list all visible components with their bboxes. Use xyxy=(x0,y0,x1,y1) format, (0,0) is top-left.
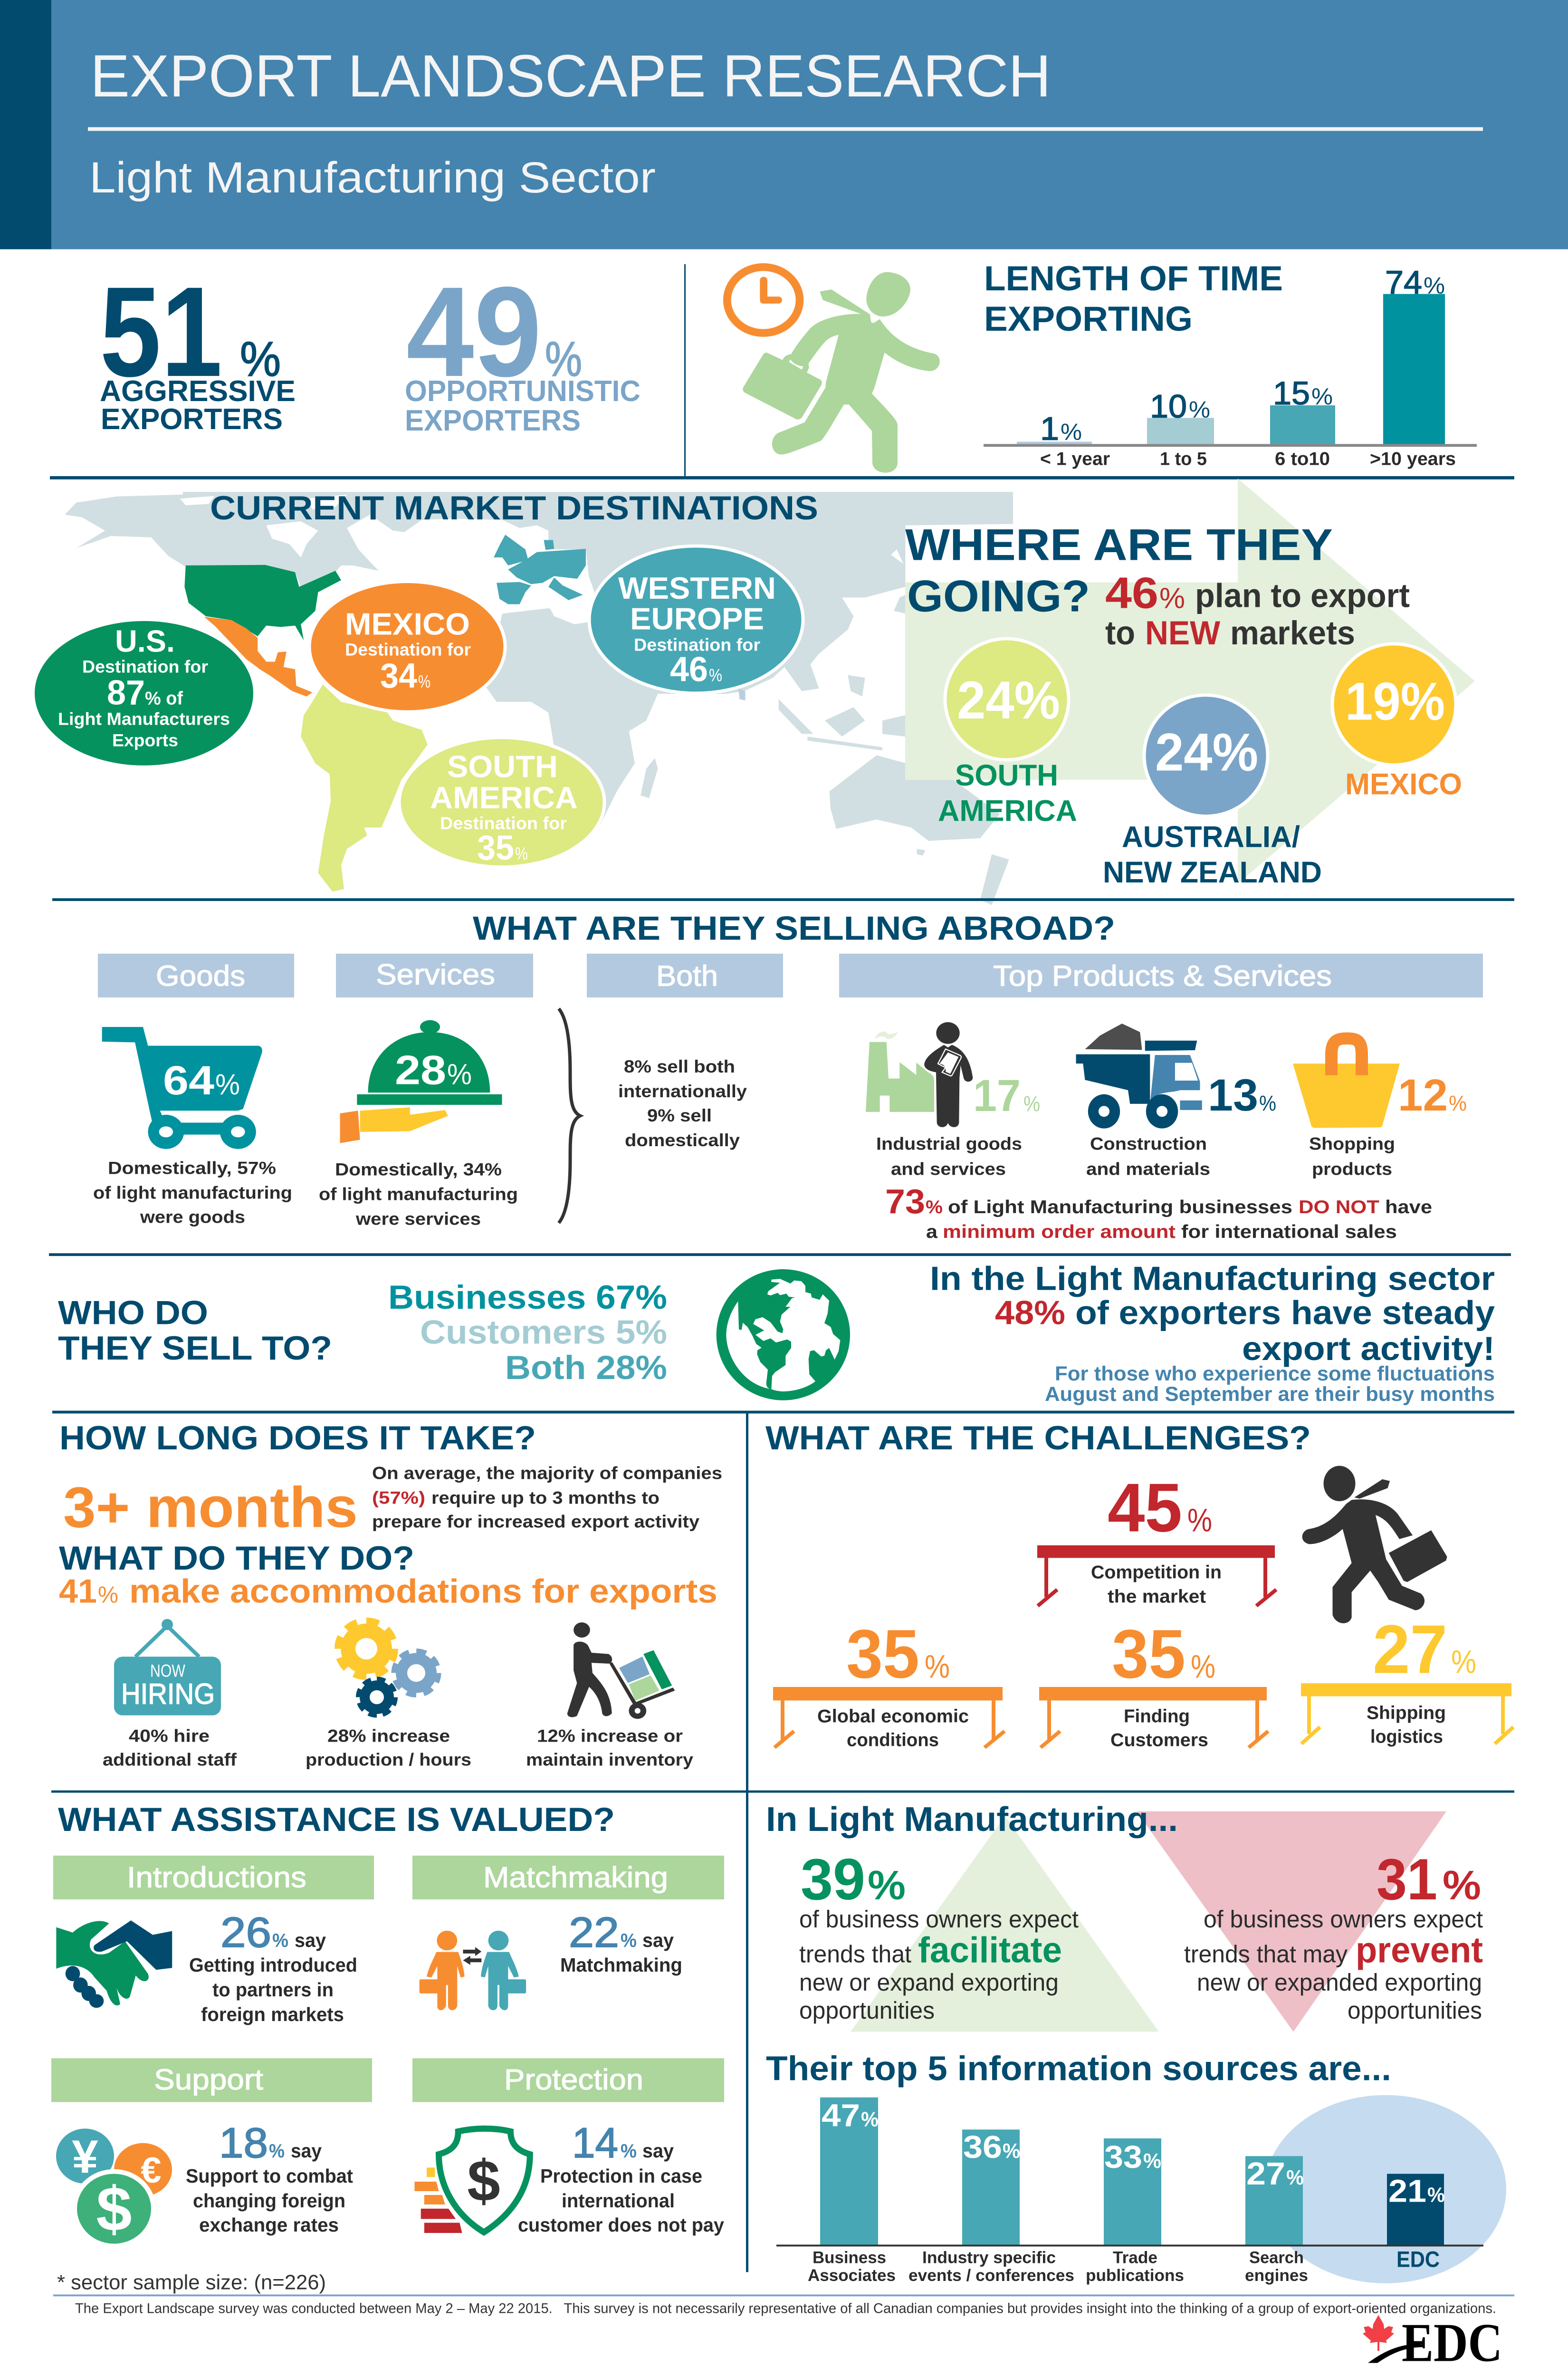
bar chart: 6 to10 xyxy=(1275,449,1330,469)
text: goods domestically xyxy=(93,1158,292,1226)
hurdle: global economic 35%: % xyxy=(925,1648,950,1685)
icon: shield and stairs: $ xyxy=(467,2148,500,2213)
tab: matchmaking xyxy=(412,1856,724,1899)
text: 73% no minimum order amount xyxy=(885,1182,1432,1242)
callout: Western Europe destination xyxy=(589,546,803,693)
tab: both: Both xyxy=(656,960,718,992)
text: 73% no minimum order amount: 73 xyxy=(885,1182,925,1221)
labels: source names: Business xyxy=(813,2248,886,2267)
tab: protection: Protection xyxy=(504,2064,643,2096)
bar chart: % xyxy=(861,2108,879,2131)
bar chart: 27 xyxy=(1246,2156,1285,2192)
stat: 51% aggressive: % xyxy=(240,332,281,387)
heading: where are they going xyxy=(905,520,1333,621)
tab: support: Support xyxy=(154,2064,263,2096)
stat: 51% aggressive xyxy=(100,260,296,436)
icon: currency coins xyxy=(56,2128,172,2246)
stat: 51% aggressive: AGGRESSIVE xyxy=(100,375,296,408)
labels: source names: Search xyxy=(1249,2248,1304,2267)
text: 73% no minimum order amount: have xyxy=(1385,1197,1432,1217)
bar chart xyxy=(984,264,1477,469)
callout: Mexico destination xyxy=(309,582,505,712)
labels: source names: events / conferences xyxy=(908,2266,1074,2285)
panel: exporter types xyxy=(100,260,641,437)
icon: shield and stairs xyxy=(414,2128,530,2233)
callout: U.S. destination xyxy=(33,620,255,767)
text: 22% matchmaking: say xyxy=(642,1929,674,1951)
hurdle: shipping logistics 27%: logistics xyxy=(1370,1726,1443,1747)
hurdle: competition 45% xyxy=(1037,1469,1276,1607)
text: 26% introductions: Getting introduced xyxy=(189,1954,357,1976)
triangle: facilitate xyxy=(851,1816,1159,2031)
heading xyxy=(984,259,1283,338)
text: steady export activity: export activity! xyxy=(1242,1330,1495,1368)
hurdle: finding customers 35%: Customers xyxy=(1110,1730,1208,1750)
text: 14% protection xyxy=(518,2119,724,2236)
heading: HOW LONG DOES IT TAKE? xyxy=(59,1419,536,1457)
text: explanation: (57%) xyxy=(372,1488,425,1508)
tab: goods xyxy=(98,954,294,997)
title: EXPORT LANDSCAPE RESEARCH xyxy=(90,42,1051,109)
heading: current market destinations: CURRENT MARKET DESTINATIONS xyxy=(210,489,818,527)
highlight: EDC circle xyxy=(1265,2095,1506,2283)
bar chart: % xyxy=(1143,2150,1161,2173)
bar chart: % xyxy=(1424,273,1445,299)
hurdle: finding customers 35%: 35 xyxy=(1112,1616,1186,1693)
tab: top products and services xyxy=(839,954,1483,997)
heading: In Light Manufacturing... xyxy=(766,1800,1178,1839)
text: 31% prevent: new or expanded exporting xyxy=(1197,1969,1482,1996)
text: 41% accommodations: make accommodations for exports xyxy=(129,1572,717,1610)
icon: now hiring sign: NOW xyxy=(150,1661,185,1680)
text: goods domestically: of light manufacturing xyxy=(93,1183,292,1202)
stat: 49% opportunistic: % xyxy=(545,332,582,387)
text: steady export activity xyxy=(930,1260,1495,1406)
text: 26% introductions: to partners in xyxy=(212,1978,334,2001)
callout: U.S. destination: U.S. xyxy=(115,624,175,658)
stat: 51% aggressive: 51 xyxy=(100,260,222,403)
label: increase production: 28% increase xyxy=(327,1726,450,1746)
text: 14% protection: Protection in case xyxy=(540,2165,702,2187)
bar chart: 21 xyxy=(1388,2174,1426,2209)
text: services domestically: of light manufacturing xyxy=(319,1184,518,1204)
icon: gears xyxy=(338,1621,439,1715)
labels: product categories: Shopping xyxy=(1309,1134,1395,1154)
label: hire: 40% hire xyxy=(129,1726,210,1746)
text: steady export activity: In the Light Manufacturing sector xyxy=(930,1260,1495,1298)
tab: introductions xyxy=(53,1856,374,1899)
text: 22% matchmaking: 22 xyxy=(569,1909,619,1956)
labels: source names: Industry specific xyxy=(922,2248,1056,2267)
bar chart: 36 xyxy=(963,2130,1002,2165)
text: 14% protection: % xyxy=(621,2140,637,2162)
callout: 19% Mexico: 19% xyxy=(1345,672,1445,731)
labels: product categories xyxy=(876,1134,1395,1178)
label: inventory: maintain inventory xyxy=(526,1750,693,1770)
hurdle: finding customers 35%: Finding xyxy=(1124,1706,1190,1726)
icon: shopping cart 64% xyxy=(102,1027,262,1149)
text: explanation: On average, the majority of companies xyxy=(372,1463,722,1483)
icon: worker with hand truck xyxy=(567,1622,675,1719)
footer note: The Export Landscape survey was conducted between May 2 – May 22 2015. This survey is not necessarily representative of all Canadian companies but provides insight into the thinking of a group of export-oriented organizations. xyxy=(75,2301,1496,2317)
heading: who do they sell to: THEY SELL TO? xyxy=(58,1329,332,1367)
text: 31% prevent: of business owners expect xyxy=(1204,1905,1483,1933)
text: 18% support: % xyxy=(269,2140,285,2162)
callout: 19% Mexico xyxy=(1332,644,1462,801)
text: services domestically xyxy=(319,1159,518,1228)
stats: customer types: Businesses 67% xyxy=(388,1279,667,1316)
text: goods domestically: were goods xyxy=(140,1207,245,1226)
text: 46% plan to export to new markets: % xyxy=(1159,582,1185,614)
icon: cloche 28%: % xyxy=(447,1058,472,1091)
text: 39% facilitate: opportunities xyxy=(799,1997,935,2024)
icon: dump truck 13%: 13 xyxy=(1208,1070,1258,1121)
text: 46% plan to export to new markets xyxy=(1105,568,1410,652)
callout: 24% South America xyxy=(938,639,1077,827)
icon: factory and worker 17%: 17 xyxy=(973,1071,1021,1121)
icon: globe xyxy=(717,1269,850,1400)
callout: 19% Mexico: MEXICO xyxy=(1345,768,1462,801)
text: explanation: prepare for increased export activity xyxy=(372,1512,699,1532)
heading: WHAT DO THEY DO? xyxy=(59,1540,414,1577)
label: hire: additional staff xyxy=(103,1750,237,1770)
icon: shopping cart 64%: 64 xyxy=(163,1058,214,1103)
text: goods domestically: Domestically, 57% xyxy=(108,1158,276,1178)
hurdle: global economic 35%: Global economic xyxy=(817,1706,969,1726)
icon: cloche 28%: 28 xyxy=(395,1047,446,1093)
text: 46% plan to export to new markets: markets xyxy=(1230,614,1355,652)
bar chart: % xyxy=(1003,2140,1020,2163)
icon: now hiring sign: HIRING xyxy=(121,1678,215,1710)
text: 73% no minimum order amount: DO NOT xyxy=(1299,1197,1379,1217)
callout: 24% Australia / New Zealand: AUSTRALIA/ xyxy=(1122,821,1300,853)
callout: South America destination: 35 xyxy=(477,828,514,867)
icon: currency coins: ¥ xyxy=(72,2130,98,2183)
tab: top products and services: Top Products & Services xyxy=(993,960,1332,992)
text: both summary xyxy=(618,1056,747,1150)
stats: customer types xyxy=(388,1279,667,1387)
labels: source names: EDC xyxy=(1396,2247,1440,2272)
text: 18% support: 18 xyxy=(219,2119,268,2167)
icon: curly brace xyxy=(559,1009,580,1223)
text: 14% protection: international xyxy=(562,2189,675,2212)
panel: challenges xyxy=(765,1419,1513,1750)
text: 39% facilitate: 39 xyxy=(801,1847,865,1912)
icon: handshake xyxy=(56,1920,172,2008)
text: 18% support: changing foreign xyxy=(193,2189,345,2212)
bar chart: 74 xyxy=(1385,264,1422,300)
callout: Western Europe destination: % xyxy=(709,665,722,685)
tab: protection xyxy=(412,2058,724,2102)
tab: matchmaking: Matchmaking xyxy=(483,1861,668,1894)
bar chart: % xyxy=(1061,419,1082,445)
tab: goods: Goods xyxy=(156,960,245,992)
icon: shopping bag 12%: 12 xyxy=(1398,1070,1448,1121)
text: 73% no minimum order amount: of Light Manufacturing businesses xyxy=(948,1197,1292,1217)
tab: services xyxy=(336,954,533,997)
icon: running businessman (green) xyxy=(743,272,940,473)
tab: introductions: Introductions xyxy=(127,1861,306,1894)
labels: product categories: Construction xyxy=(1090,1134,1207,1154)
text: 22% matchmaking: Matchmaking xyxy=(560,1954,682,1976)
callout: 24% South America: 24% xyxy=(957,671,1060,730)
heading: Their top 5 information sources are... xyxy=(766,2049,1391,2088)
bar chart: 47 xyxy=(822,2098,860,2133)
text: 18% support: Support to combat xyxy=(186,2165,353,2187)
callout: U.S. destination: Exports xyxy=(112,730,178,750)
text: 14% protection: 14 xyxy=(572,2119,618,2167)
heading: LENGTH OF TIME xyxy=(984,259,1283,298)
text: 46% plan to export to new markets: plan to export xyxy=(1195,577,1410,614)
text: 41% accommodations: 41 xyxy=(59,1572,97,1610)
text: 39% facilitate: trends that xyxy=(799,1940,911,1967)
text: 14% protection: customer does not pay xyxy=(518,2213,724,2236)
logo: EDC xyxy=(1363,2313,1502,2373)
callout: 24% Australia / New Zealand: NEW ZEALAND xyxy=(1103,856,1322,889)
heading: WHAT ARE THE CHALLENGES? xyxy=(765,1419,1311,1457)
icon: currency coins: € xyxy=(141,2150,162,2191)
hurdle: shipping logistics 27%: 27 xyxy=(1373,1611,1447,1688)
icon: currency coins: $ xyxy=(96,2174,132,2244)
labels: source names: Trade xyxy=(1113,2248,1157,2267)
text: 39% facilitate xyxy=(799,1847,1079,2024)
panel: what do they do xyxy=(59,1540,717,1770)
text: explanation xyxy=(372,1463,722,1532)
hurdle: global economic 35%: 35 xyxy=(846,1616,919,1693)
callout: South America destination xyxy=(399,738,604,867)
panel: length of time exporting xyxy=(984,259,1477,469)
bar chart: 33 xyxy=(1104,2139,1142,2175)
bar chart: >10 years xyxy=(1370,449,1456,469)
stat: 49% opportunistic: OPPORTUNISTIC xyxy=(405,375,641,408)
heading: what are they selling abroad: WHAT ARE THEY SELLING ABROAD? xyxy=(473,910,1115,947)
triangle: prevent xyxy=(1137,1811,1446,2031)
bar chart: 10 xyxy=(1150,388,1187,424)
hurdle: shipping logistics 27%: Shipping xyxy=(1367,1703,1446,1724)
callout: South America destination: AMERICA xyxy=(430,781,578,815)
stat: 51% aggressive: EXPORTERS xyxy=(101,403,283,436)
tab: both xyxy=(587,954,783,997)
text: 31% prevent: opportunities xyxy=(1348,1997,1482,2024)
stat: 49% opportunistic: 49 xyxy=(406,260,542,403)
text: steady export activity: 48% xyxy=(995,1294,1065,1332)
icon: shopping bag 12%: % xyxy=(1449,1092,1467,1115)
text: 46% plan to export to new markets: to xyxy=(1105,614,1135,652)
text: 18% support xyxy=(186,2119,353,2236)
icon: factory and worker 17%: % xyxy=(1023,1092,1040,1116)
hurdle: competition 45%: % xyxy=(1187,1502,1212,1538)
panel: expected trends xyxy=(766,1800,1483,2031)
callout: U.S. destination: Destination for xyxy=(82,657,208,677)
header banner xyxy=(0,0,1568,249)
text: 31% prevent: trends that may xyxy=(1184,1940,1348,1967)
icon: now hiring sign xyxy=(114,1619,221,1715)
text: 18% support: say xyxy=(291,2140,322,2162)
callout: Mexico destination: % xyxy=(418,671,430,691)
text: 22% matchmaking: % xyxy=(621,1929,637,1951)
callout: 24% South America: AMERICA xyxy=(938,795,1077,827)
labels: product categories: Industrial goods xyxy=(876,1134,1022,1154)
text: 73% no minimum order amount: minimum order amount xyxy=(943,1221,1176,1242)
text: 46% plan to export to new markets: NEW xyxy=(1145,614,1221,652)
text: 26% introductions: foreign markets xyxy=(201,2003,344,2025)
hurdle: competition 45%: the market xyxy=(1108,1586,1206,1607)
labels: product categories: products xyxy=(1312,1159,1392,1178)
callout: Mexico destination: Destination for xyxy=(345,640,471,659)
text: 39% facilitate: new or expand exporting xyxy=(799,1969,1059,1996)
heading: where are they going: GOING? xyxy=(907,571,1090,621)
callout: 24% Australia / New Zealand: 24% xyxy=(1155,723,1258,782)
callout: South America destination: Destination for xyxy=(440,813,567,833)
text: 73% no minimum order amount: for international sales xyxy=(1181,1221,1397,1242)
text: 14% protection: say xyxy=(642,2140,674,2162)
text: 31% prevent: 31 xyxy=(1377,1847,1437,1912)
hurdle: global economic 35% xyxy=(773,1616,1004,1750)
heading: WHAT ASSISTANCE IS VALUED? xyxy=(58,1801,615,1839)
bar chart: 15 xyxy=(1273,375,1310,412)
heading: who do they sell to: WHO DO xyxy=(58,1294,208,1332)
logo: EDC: EDC xyxy=(1402,2313,1502,2373)
text: 22% matchmaking xyxy=(560,1909,682,1976)
tab: support xyxy=(51,2058,372,2102)
labels: source names: engines xyxy=(1245,2266,1308,2285)
labels: product categories: and materials xyxy=(1086,1159,1210,1178)
text: 73% no minimum order amount: a xyxy=(926,1221,938,1242)
text: steady export activity: August and September are their busy months xyxy=(1045,1383,1495,1406)
panel: what assistance is valued xyxy=(51,1801,724,2246)
labels: source names: publications xyxy=(1086,2266,1184,2285)
icon: factory and worker 17% xyxy=(866,1022,1040,1127)
callout: 24% South America: SOUTH xyxy=(955,759,1058,792)
text: 31% prevent: % xyxy=(1443,1863,1481,1908)
text: both summary: 9% sell xyxy=(647,1105,712,1125)
text: 39% facilitate: of business owners expect xyxy=(799,1905,1079,1933)
note: sample size: * sector sample size: (n=226) xyxy=(57,2271,326,2294)
label: increase production: production / hours xyxy=(306,1750,471,1770)
icon: clock xyxy=(727,267,800,333)
callout: Western Europe destination: WESTERN xyxy=(618,571,776,605)
text: 31% prevent xyxy=(1184,1847,1483,2024)
region: Mexico xyxy=(204,617,312,697)
text: 26% introductions: 26 xyxy=(220,1909,271,1956)
callout: South America destination: SOUTH xyxy=(447,749,558,784)
hurdle: shipping logistics 27%: % xyxy=(1451,1643,1476,1680)
text: services domestically: were services xyxy=(355,1209,481,1228)
stat: 49% opportunistic xyxy=(405,260,641,437)
stat: 49% opportunistic: EXPORTERS xyxy=(405,404,581,437)
callout: 24% Australia / New Zealand xyxy=(1103,695,1322,889)
callout: U.S. destination: % of xyxy=(145,688,183,709)
hurdle: global economic 35%: conditions xyxy=(847,1730,939,1750)
text: 46% plan to export to new markets: 46 xyxy=(1105,568,1158,617)
callout: South America destination: % xyxy=(515,843,528,863)
stat: 3+ months: 3+ months xyxy=(63,1475,358,1539)
bar chart: % xyxy=(1427,2184,1445,2206)
label: increase production xyxy=(306,1726,471,1770)
hurdle: competition 45%: 45 xyxy=(1108,1469,1182,1546)
heading: EXPORTING xyxy=(984,299,1193,338)
text: services domestically: Domestically, 34% xyxy=(335,1159,502,1179)
icon: dump truck 13% xyxy=(1076,1024,1276,1129)
hurdle: finding customers 35% xyxy=(1039,1616,1268,1750)
icon: shopping cart 64%: % xyxy=(215,1068,240,1101)
region: U.S. xyxy=(184,565,341,640)
heading: who do they sell to xyxy=(58,1294,332,1367)
panel: how long does it take xyxy=(59,1419,722,1539)
icon: dump truck 13%: % xyxy=(1259,1092,1276,1115)
text: 41% accommodations: % xyxy=(98,1582,118,1608)
hurdle: finding customers 35%: % xyxy=(1191,1648,1215,1685)
label: inventory: 12% increase or xyxy=(537,1726,683,1746)
bar chart: % xyxy=(1189,397,1210,422)
callout: Western Europe destination: Destination for xyxy=(634,635,760,655)
text: 26% introductions: say xyxy=(295,1929,326,1951)
panel: top 5 information sources xyxy=(766,2049,1506,2285)
icon: cloche 28% xyxy=(340,1020,502,1143)
text: 73% no minimum order amount: % xyxy=(926,1197,943,1217)
text: both summary: domestically xyxy=(625,1130,740,1150)
labels: source names xyxy=(808,2247,1440,2285)
arrow: where are they going xyxy=(905,479,1475,884)
subtitle: Light Manufacturing Sector xyxy=(89,153,656,202)
text: explanation: require up to 3 months to xyxy=(431,1488,660,1508)
text: both summary: internationally xyxy=(618,1081,747,1101)
icon: shopping bag 12% xyxy=(1293,1038,1467,1128)
text: steady export activity: For those who experience some fluctuations xyxy=(1055,1362,1495,1385)
callout: U.S. destination: 87 xyxy=(107,673,145,712)
callout: Western Europe destination: EUROPE xyxy=(630,602,764,636)
bar chart: 1 xyxy=(1040,410,1059,447)
region: South America xyxy=(301,684,428,891)
heading: where are they going: WHERE ARE THEY xyxy=(905,520,1333,570)
text: 39% facilitate: % xyxy=(868,1863,906,1908)
icon: running businessman (dark) xyxy=(1302,1466,1447,1623)
hurdle: shipping logistics 27% xyxy=(1301,1611,1513,1747)
text: 26% introductions: % xyxy=(272,1929,288,1951)
text: 39% facilitate: facilitate xyxy=(918,1930,1062,1970)
callout: U.S. destination: Light Manufacturers xyxy=(58,709,230,728)
text: 18% support: exchange rates xyxy=(199,2213,339,2236)
bar chart: < 1 year xyxy=(1040,449,1110,469)
icon: two people matchmaking xyxy=(420,1931,526,2010)
bar chart: 1 to 5 xyxy=(1160,449,1207,469)
label: inventory xyxy=(526,1726,693,1770)
hurdle: competition 45%: Competition in xyxy=(1091,1562,1222,1582)
bar chart: % xyxy=(1311,383,1333,410)
stats: customer types: Customers 5% xyxy=(420,1313,667,1351)
labels: product categories: and services xyxy=(891,1159,1006,1178)
text: steady export activity: of exporters have steady xyxy=(1075,1294,1495,1332)
region: Western Europe xyxy=(494,535,586,604)
text: 31% prevent: prevent xyxy=(1356,1930,1483,1970)
label: hire xyxy=(103,1726,237,1770)
text: both summary: 8% sell both xyxy=(624,1056,735,1076)
bar chart: % xyxy=(1286,2166,1304,2189)
callout: Mexico destination: MEXICO xyxy=(345,607,470,641)
world map xyxy=(65,492,1013,905)
callout: Western Europe destination: 46 xyxy=(670,650,708,689)
text: 26% introductions xyxy=(189,1909,357,2025)
labels: source names: Associates xyxy=(808,2266,896,2285)
stats: customer types: Both 28% xyxy=(505,1349,667,1387)
bar chart xyxy=(776,2098,1483,2246)
callout: Mexico destination: 34 xyxy=(380,656,417,695)
tab: services: Services xyxy=(376,958,495,991)
